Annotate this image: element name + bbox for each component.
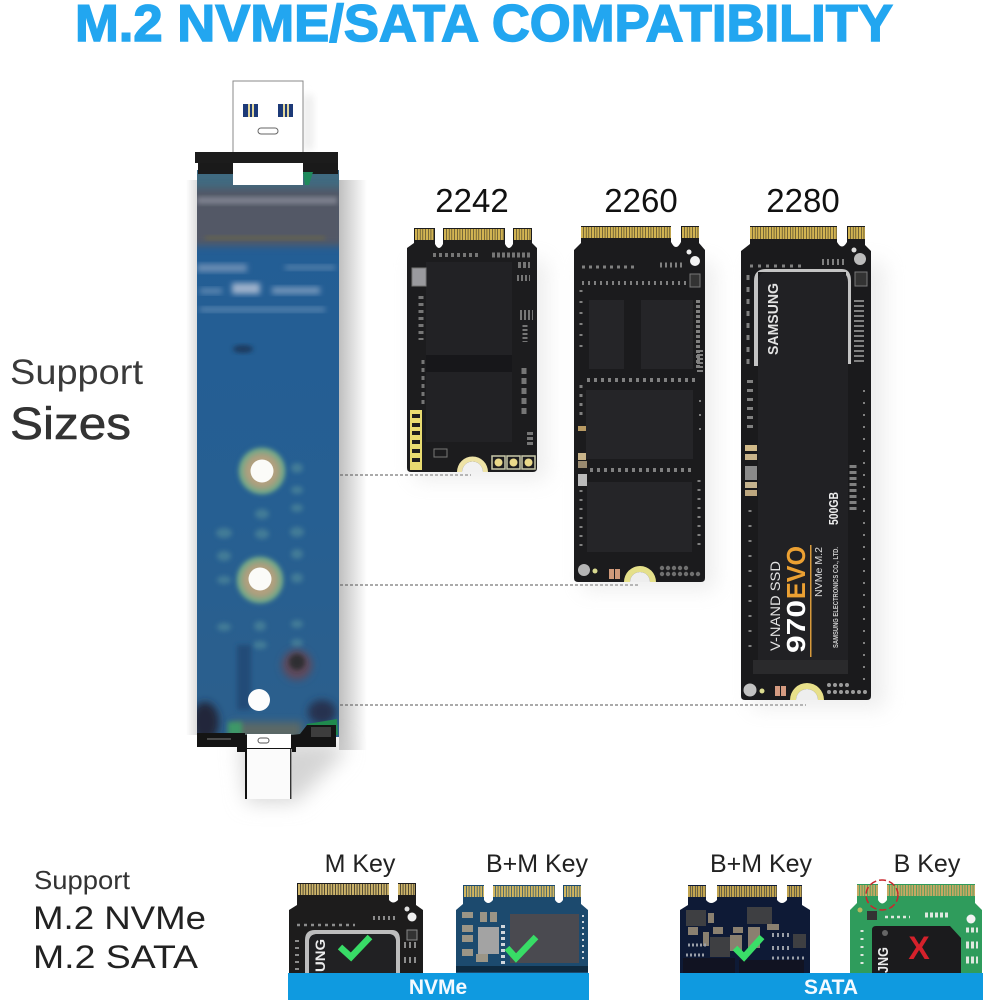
heading: supported protocols: Support [34, 865, 131, 895]
key label: M Key: M Key [325, 850, 396, 878]
notch arc [457, 456, 488, 472]
samsung label sticker [753, 272, 848, 674]
bottom details [744, 683, 867, 696]
size label 2242: 2242 [435, 182, 509, 219]
bar: SATA: SATA [804, 976, 858, 999]
enclosure with USB connectors [186, 81, 367, 802]
heading: supported protocols: M.2 NVMe [33, 900, 206, 936]
samsung label sticker: 500GB [826, 492, 841, 525]
samsung label sticker: EVO [781, 546, 811, 599]
SSD 2280 [741, 226, 885, 708]
samsung label sticker: V-NAND SSD [767, 561, 783, 651]
key label: B+M Key SATA: B+M Key [710, 850, 813, 878]
heading: support sizes [10, 353, 143, 449]
SSD 2242 [407, 228, 547, 480]
USB-A plug [233, 81, 303, 153]
samsung label sticker: SAMSUNG ELECTRONICS CO., LTD. [833, 547, 840, 648]
samsung label sticker: SAMSUNG [765, 283, 782, 355]
red cross: X [908, 930, 930, 966]
bottom cap and green edge [197, 719, 338, 752]
side parts [745, 445, 757, 496]
card: M Key SSD: UNG [312, 939, 328, 972]
notch arc [790, 683, 824, 700]
bar: NVMe [288, 973, 589, 1000]
SSD 2260 [574, 226, 715, 590]
samsung label sticker: 970 [781, 600, 811, 653]
bar: SATA [680, 973, 983, 1000]
key label: B Key: B Key [894, 850, 961, 878]
flash chips [586, 300, 693, 552]
card: B+M Key SATA SSD [680, 885, 810, 975]
samsung label sticker: NVMe M.2 [814, 547, 825, 597]
heading: support sizes: Sizes [10, 398, 131, 449]
surface components [412, 255, 533, 445]
contact pads [410, 410, 535, 470]
red dashed circle [866, 880, 898, 910]
card: B Key SSD: JNG [875, 947, 892, 973]
key label: B+M Key NVMe: B+M Key [486, 850, 589, 878]
notch arc [624, 566, 656, 582]
heading: supported protocols: M.2 SATA [33, 939, 199, 975]
size label 2280: 2280 [766, 182, 840, 219]
mounting holes [248, 460, 274, 711]
heading: support sizes: Support [10, 353, 143, 392]
card: M Key SSD [289, 883, 423, 975]
size label 2260: 2260 [604, 182, 678, 219]
bottom details [578, 564, 700, 579]
heading: supported protocols [33, 865, 206, 975]
dotted connector lines [340, 475, 806, 705]
surface components [581, 265, 700, 550]
bar: NVMe: NVMe [409, 976, 467, 999]
card: B Key SSD [850, 880, 982, 975]
blurred circuit board [197, 170, 339, 737]
surface components [748, 262, 864, 690]
top cap and inner USB [195, 152, 338, 185]
side parts [578, 426, 587, 486]
silver surround [754, 269, 851, 366]
USB-C plug [245, 734, 292, 799]
flash chip [426, 262, 512, 442]
card: B+M Key NVMe SSD [456, 885, 588, 975]
